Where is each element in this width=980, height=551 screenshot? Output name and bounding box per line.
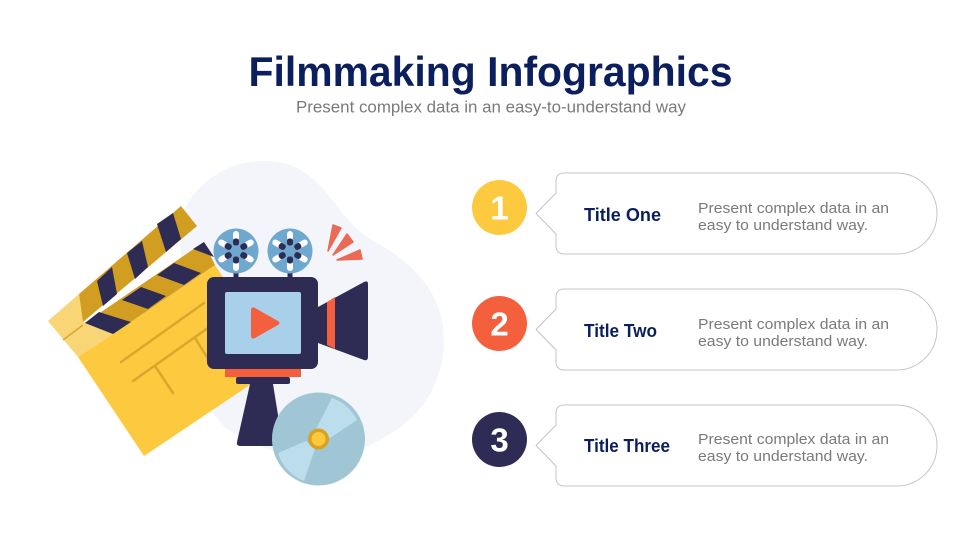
callout 1: Title One [584,205,661,225]
subtitle: Present complex data in an easy-to-understand way [296,98,686,116]
icon: sparks [328,225,362,260]
callout 1: easy to understand way. [698,217,868,234]
icon: film reels [214,228,312,279]
number badge 1 [472,180,527,235]
callout 3: Title Three [584,436,670,456]
item 3 [472,405,937,486]
icon: clapperboard [48,206,281,456]
title: Filmmaking Infographics [248,48,732,95]
number badge 1: 1 [490,190,509,226]
number badge 2: 2 [490,306,509,342]
number badge 2 [472,296,527,351]
callout 3 [536,405,937,486]
icon: video camera [207,277,368,446]
callout 2 [536,289,937,370]
item 2 [472,289,937,370]
icon: disc [272,392,365,486]
callout 2: easy to understand way. [698,333,868,350]
callout 3: easy to understand way. [698,448,868,465]
callout 2: Present complex data in an [698,316,889,333]
callout 2: Title Two [584,321,657,341]
number badge 3: 3 [490,422,509,458]
callout 3: Present complex data in an [698,431,889,448]
background blob [180,161,444,458]
number badge 3 [472,412,527,467]
item 1 [472,173,937,254]
callout 1 [536,173,937,254]
callout 1: Present complex data in an [698,200,889,217]
illustration: filmmaking scene [48,161,444,486]
